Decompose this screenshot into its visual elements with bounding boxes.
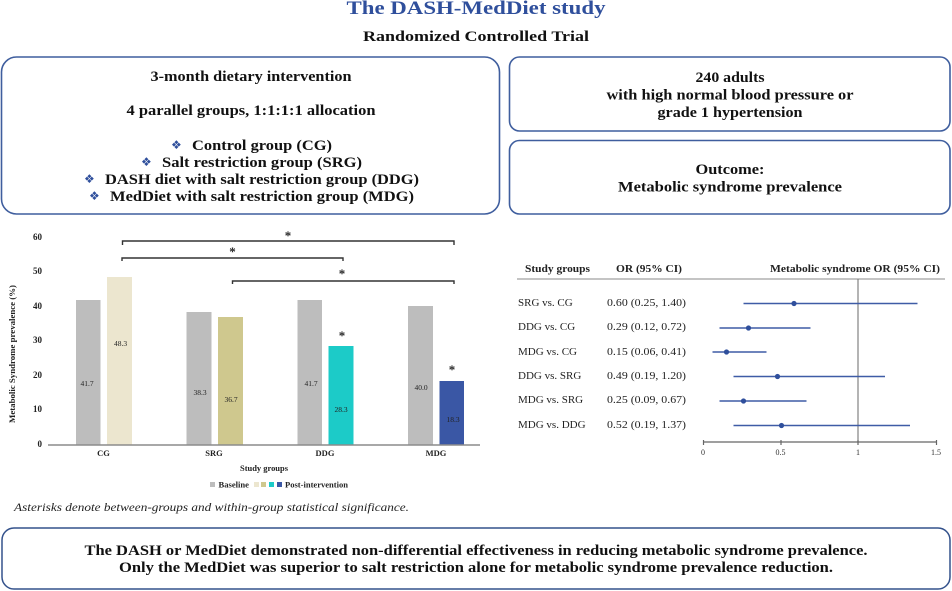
reference line: [857, 279, 859, 442]
panel: participants: with high normal blood pressure or: [606, 88, 854, 104]
group list: MedDiet with salt restriction group (MDG): [110, 189, 414, 205]
allocation text: 4 parallel groups, 1:1:1:1 allocation: [126, 103, 376, 119]
forest axis ticks: 0.5: [776, 448, 786, 457]
panel: outcome: Metabolic syndrome prevalence: [618, 180, 843, 196]
odds ratio values: 0.25 (0.09, 0.67): [607, 394, 686, 406]
significance brackets: [122, 241, 454, 284]
intervention heading: 3-month dietary intervention: [150, 69, 352, 85]
forest x axis: [704, 440, 936, 445]
significance asterisks: *: [339, 328, 345, 343]
panel: conclusion: The DASH or MedDiet demonstrated non-differential effectiveness in reducing metabolic syndrome prevalence.: [84, 543, 868, 559]
y axis ticks: 30: [33, 335, 42, 345]
odds ratio values: [607, 297, 686, 431]
y axis ticks: [33, 232, 42, 449]
row labels: MDG vs. SRG: [518, 394, 583, 406]
bars: CG: 41.7: [80, 379, 94, 388]
confidence intervals: [712, 304, 918, 426]
odds ratio values: 0.49 (0.19, 1.20): [607, 370, 686, 382]
forest axis ticks: 1.5: [931, 448, 941, 457]
bars: MDG: [408, 306, 464, 444]
x axis: [48, 444, 480, 446]
odds ratio values: 0.60 (0.25, 1.40): [607, 297, 686, 309]
group list: ❖: [141, 155, 152, 169]
group list: ❖: [84, 172, 95, 186]
odds ratio values: 0.15 (0.06, 0.41): [607, 346, 686, 358]
y axis ticks: 50: [33, 266, 42, 276]
bars: MDG: 40.0: [414, 383, 428, 392]
y axis ticks: 20: [33, 370, 42, 380]
bars: CG: [76, 277, 132, 444]
group list: Control group (CG): [192, 138, 332, 154]
significance asterisks: *: [449, 362, 455, 377]
panel: outcome: Outcome:: [696, 162, 764, 178]
category labels: MDG: [426, 448, 447, 458]
forest axis ticks: 1: [856, 448, 860, 457]
y axis ticks: 60: [33, 232, 42, 242]
row labels: DDG vs. CG: [518, 321, 575, 333]
group list: ❖: [89, 189, 100, 203]
x axis title: Study groups: [240, 463, 289, 473]
table header: OR (95% CI): [616, 264, 683, 275]
panel: intervention: [2, 57, 500, 214]
bars: DDG: [298, 300, 354, 444]
bars: SRG: 38.3: [193, 388, 207, 397]
bars: DDG: 28.3: [334, 405, 348, 414]
bars: SRG: [186, 312, 243, 444]
panel: conclusion: Only the MedDiet was superior to salt restriction alone for metabolic syndrome prevalence reduction.: [119, 560, 833, 576]
bar chart: [7, 228, 480, 490]
group list: [84, 138, 419, 205]
group list: DASH diet with salt restriction group (DDG): [105, 172, 419, 188]
legend: Baseline: [218, 480, 249, 490]
panel: outcome: [510, 140, 950, 214]
forest plot: [517, 264, 945, 457]
significance asterisks: *: [339, 266, 345, 281]
panel: participants: [510, 57, 950, 131]
forest axis ticks: 0: [701, 448, 705, 457]
bars: DDG: 41.7: [304, 379, 318, 388]
y axis ticks: 0: [38, 439, 42, 449]
panel: participants: grade 1 hypertension: [658, 105, 802, 121]
category labels: SRG: [205, 448, 223, 458]
panel: participants: 240 adults: [696, 70, 765, 86]
y axis title: Metabolic Syndrome prevalence (%): [7, 285, 17, 423]
y axis ticks: 40: [33, 301, 42, 311]
significance asterisks: [229, 228, 455, 377]
legend: [210, 480, 349, 490]
legend: Post-intervention: [285, 480, 349, 490]
category labels: [97, 448, 447, 458]
row labels: [518, 297, 586, 431]
odds ratio values: 0.52 (0.19, 1.37): [607, 419, 686, 431]
subtitle: Randomized Controlled Trial: [363, 29, 589, 45]
group list: ❖: [171, 138, 182, 152]
row labels: MDG vs. CG: [518, 346, 577, 358]
y axis ticks: 10: [33, 404, 42, 414]
bars: SRG: 36.7: [224, 395, 238, 404]
significance asterisks: *: [229, 244, 236, 259]
point estimates: [724, 301, 797, 428]
table header: Study groups: [525, 264, 590, 275]
category labels: DDG: [316, 448, 335, 458]
significance asterisks: *: [285, 228, 291, 243]
panel: conclusion: [2, 528, 950, 589]
row labels: MDG vs. DDG: [518, 419, 586, 431]
table header: Metabolic syndrome OR (95% CI): [770, 264, 941, 275]
odds ratio values: 0.29 (0.12, 0.72): [607, 321, 686, 333]
row labels: DDG vs. SRG: [518, 370, 581, 382]
bars: CG: 48.3: [114, 339, 127, 348]
row labels: SRG vs. CG: [518, 297, 573, 309]
table header: [525, 264, 941, 275]
forest axis ticks: [701, 448, 941, 457]
bars: MDG: 18.3: [446, 415, 460, 424]
group list: Salt restriction group (SRG): [162, 155, 362, 171]
footnote: Asterisks denote between-groups and within-group statistical significance.: [13, 500, 409, 514]
category labels: CG: [97, 448, 110, 458]
